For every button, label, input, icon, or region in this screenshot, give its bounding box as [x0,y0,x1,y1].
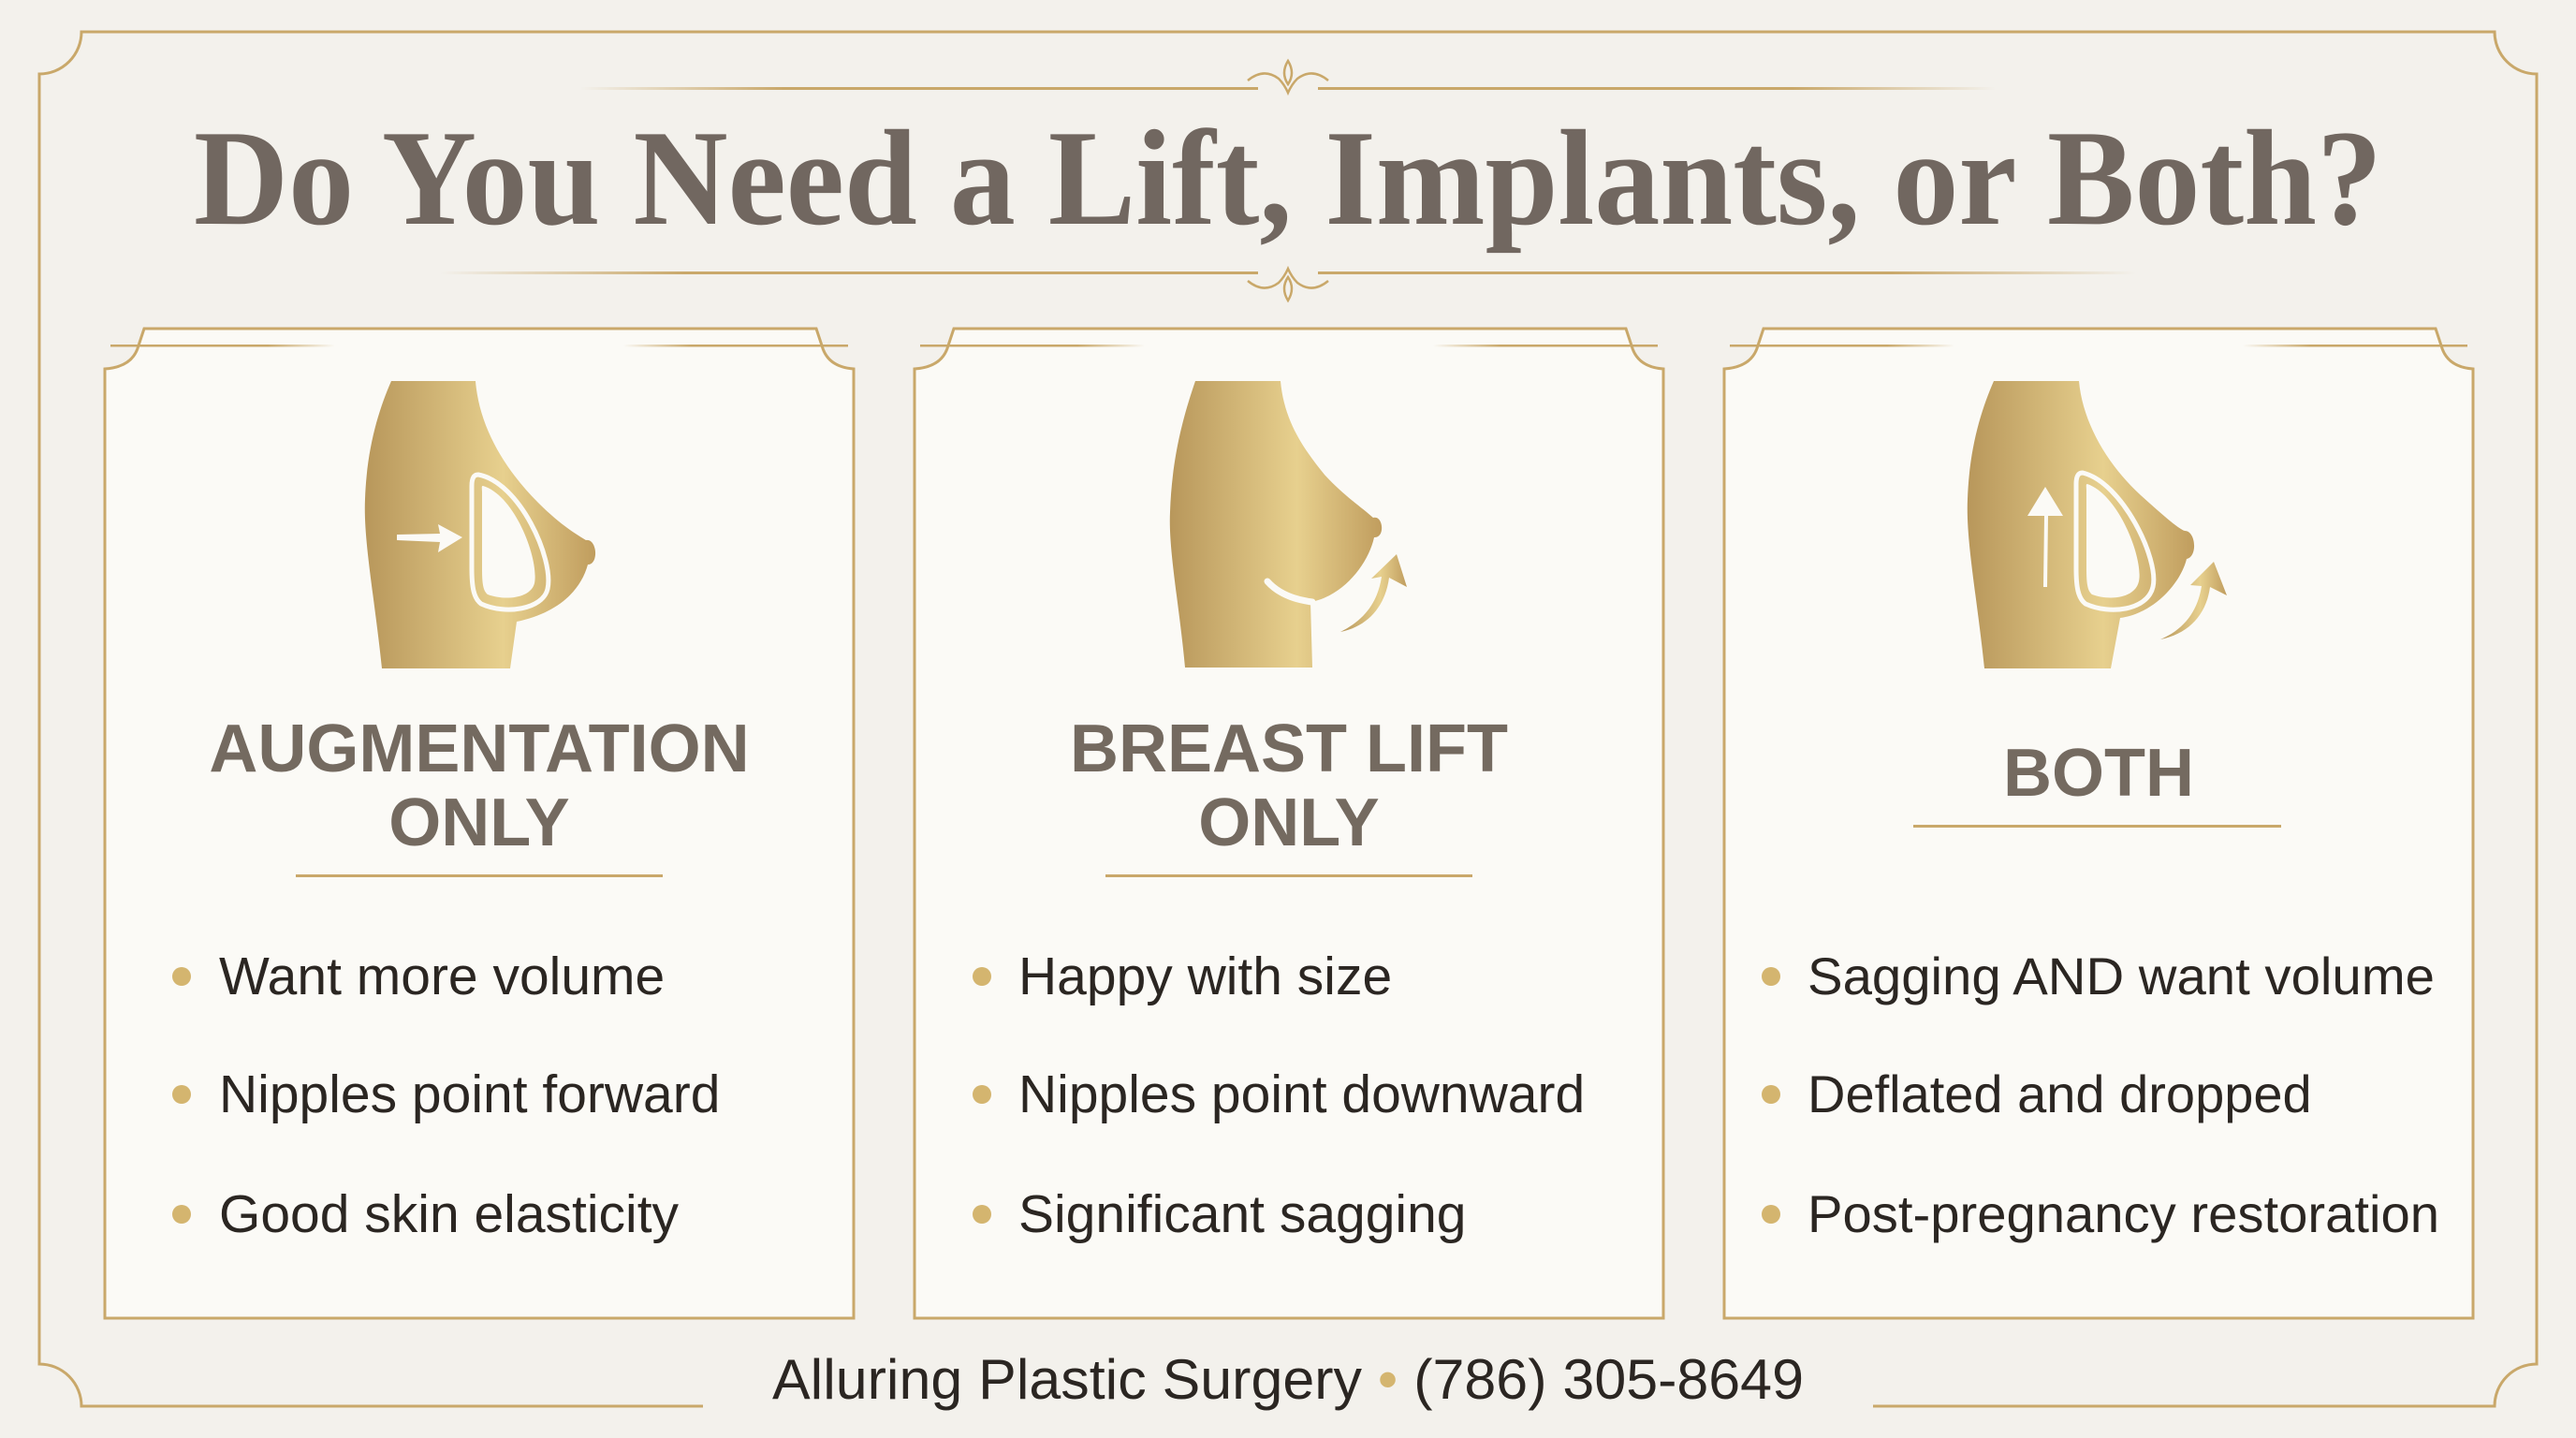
icon: torso with implant and lift arrows [1968,381,2227,668]
bullets [172,946,720,1244]
heading: AUGMENTATION [209,712,750,786]
panel: breast lift only [915,329,1663,1318]
heading: ONLY [388,785,570,860]
title ornaments [440,61,2136,301]
bullets [973,946,1585,1244]
bullets: Deflated and dropped [1808,1064,2312,1123]
heading: BOTH [2003,736,2194,811]
bullets: Significant sagging [1018,1184,1466,1244]
heading: BREAST LIFT [1070,712,1508,786]
panel: augmentation only [105,329,854,1318]
bullets: Nipples point downward [1018,1064,1585,1124]
bullets: Want more volume [219,946,665,1006]
bullets: Post-pregnancy restoration [1808,1184,2439,1243]
icon: sagging torso with lift arrow [1170,381,1407,668]
bullets: Nipples point forward [219,1064,720,1124]
bullets: Happy with size [1018,946,1392,1006]
heading [209,712,750,860]
heading: ONLY [1198,785,1380,860]
heading [1070,712,1508,860]
bullets: Good skin elasticity [219,1184,680,1244]
panel: both [1724,329,2473,1318]
bullets [1762,946,2439,1243]
icon: torso with implant [365,381,595,668]
footer: Alluring Plastic Surgery • (786) 305-8649 [772,1348,1804,1411]
title: Do You Need a Lift, Implants, or Both? [194,102,2382,254]
bullets: Sagging AND want volume [1808,946,2435,1005]
